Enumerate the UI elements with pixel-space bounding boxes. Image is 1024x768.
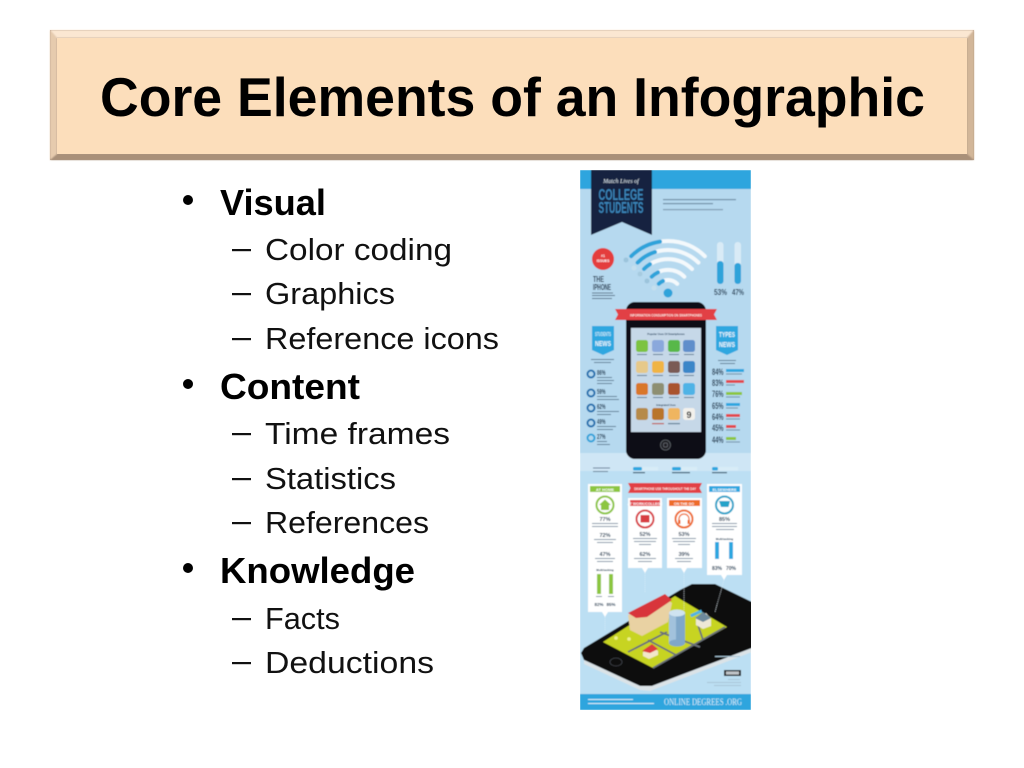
intro text	[663, 199, 736, 210]
bank	[695, 612, 711, 629]
card: elsewhere: 83%	[712, 566, 723, 572]
ribbon: smartphone use	[628, 483, 702, 493]
card: at work	[627, 498, 663, 573]
panel: students and news: 59%	[597, 389, 606, 396]
panel: types of news: 44%	[712, 435, 724, 445]
panel: types of news: 45%	[712, 423, 724, 433]
ribbon: college students	[591, 170, 652, 235]
house	[642, 644, 658, 659]
card: on the go: 39%	[678, 552, 690, 558]
card: at home: AT HOME	[596, 487, 614, 492]
footer band	[580, 694, 751, 710]
panel: types of news: 83%	[712, 378, 724, 388]
section: content: Time frames	[265, 416, 450, 451]
card: on the go: 53%	[678, 532, 690, 538]
title banner	[50, 30, 974, 160]
panel: types of news: 84%	[712, 367, 724, 377]
panel: students and news	[588, 326, 619, 445]
roads	[628, 622, 725, 668]
card: at work: 52%	[639, 532, 651, 538]
section: visual: Reference icons	[265, 321, 499, 356]
section: visual: Color coding	[265, 232, 452, 267]
ribbon: information consumption	[615, 309, 717, 320]
card: at home: 72%	[599, 533, 611, 539]
card: at home: 47%	[599, 552, 611, 558]
bar chart: thermometers: 47%	[732, 288, 744, 297]
section: content: Statistics	[265, 461, 396, 496]
section: content: Content	[220, 366, 360, 407]
infographic thumbnail	[580, 170, 752, 710]
card: elsewhere: 70%	[726, 566, 737, 572]
card: elsewhere: Multitasking	[716, 537, 733, 541]
bar chart: thermometers: 53%	[714, 288, 727, 297]
top band	[580, 170, 751, 189]
panel: students and news: NEWS	[595, 339, 611, 348]
card: at home	[588, 484, 622, 617]
main phone: Integrated Uses	[656, 403, 676, 407]
card: elsewhere: ELSEWHERE	[712, 488, 737, 492]
card: on the go	[667, 498, 702, 573]
panel: students and news: 49%	[597, 419, 606, 426]
main phone	[626, 302, 706, 459]
badge: red circle: ISSUES	[597, 259, 610, 263]
badge: red circle	[592, 248, 614, 270]
card: at home: 85%	[606, 602, 616, 607]
text: the iphone: THE	[593, 274, 604, 284]
phone home button	[660, 440, 670, 450]
school building	[628, 594, 672, 636]
title text: Core Elements of an Infographic	[100, 66, 925, 128]
isometric phone city	[581, 584, 752, 691]
section: knowledge	[183, 550, 434, 680]
text: the iphone	[592, 274, 615, 299]
section: knowledge: Deductions	[265, 645, 434, 680]
credit block	[707, 656, 741, 686]
panel: types of news	[712, 326, 744, 445]
section: visual	[183, 182, 499, 356]
section: knowledge: Facts	[265, 601, 340, 636]
panel: students and news: 62%	[597, 404, 606, 411]
ribbon: smartphone use: SMARTPHONE USE THROUGHOUT THE DAY	[634, 487, 696, 491]
card: at home: 77%	[599, 517, 611, 523]
card: at work: 62%	[639, 552, 651, 558]
bar chart: thermometers	[714, 242, 744, 297]
panel: types of news: TYPES	[719, 330, 735, 339]
card: at home: Multitasking	[596, 568, 614, 572]
strip: location stats	[593, 467, 738, 473]
card: on the go: ON THE GO	[674, 502, 694, 506]
panel: types of news: 76%	[712, 389, 724, 399]
text: the iphone: IPHONE	[593, 282, 611, 292]
app icon grid: 9	[686, 410, 692, 420]
app icon grid	[636, 340, 695, 424]
phone button	[610, 658, 622, 666]
badge: red circle: #1	[601, 254, 605, 258]
card: at work: AT WORK/COLLEGE	[627, 502, 663, 506]
ribbon: information consumption: INFORMATION CONSUMPTION ON SMARTPHONES	[630, 314, 702, 318]
main phone: Popular Uses Of Smartphones	[647, 332, 685, 336]
section: visual: Visual	[220, 182, 326, 223]
panel: types of news: 65%	[712, 401, 724, 411]
section: content	[183, 366, 450, 540]
footer band: ONLINE DEGREES .ORG	[664, 697, 742, 707]
section: knowledge: Knowledge	[220, 550, 415, 591]
wifi chart	[624, 241, 705, 298]
section: visual: Graphics	[265, 276, 395, 311]
tower	[669, 610, 685, 646]
card: at home: 82%	[594, 602, 604, 607]
connector lines	[682, 580, 724, 613]
panel: students and news: 27%	[597, 434, 606, 441]
ribbon: college students: Match Lives of	[602, 178, 640, 185]
section: content: References	[265, 505, 429, 540]
card: elsewhere	[707, 484, 742, 580]
card: elsewhere: 85%	[719, 517, 730, 523]
panel: students and news: 86%	[597, 370, 606, 377]
ribbon: college students: STUDENTS	[598, 200, 644, 217]
panel: students and news: STUDENTS	[595, 332, 611, 338]
panel: types of news: NEWS	[719, 340, 735, 349]
bullet list	[183, 182, 499, 680]
panel: types of news: 64%	[712, 412, 724, 422]
ribbon: college students: COLLEGE	[598, 187, 644, 204]
